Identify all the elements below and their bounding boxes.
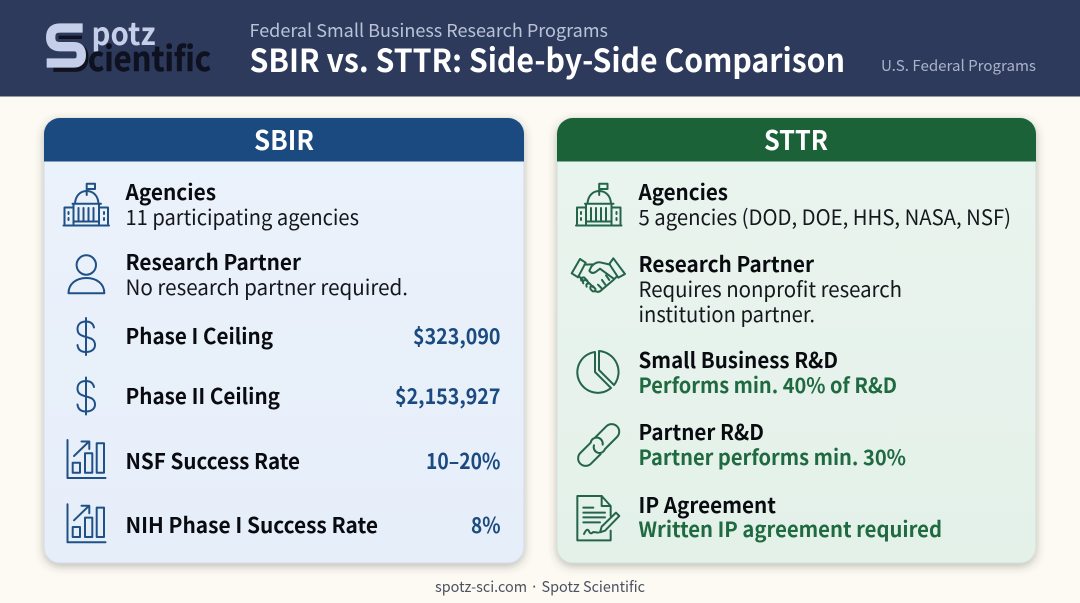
- icon: chain link: [578, 424, 619, 466]
- Partner R&D row: Partner R&D: [638, 416, 764, 447]
- NSF Success Rate row: 10–20%: [426, 445, 501, 476]
- footer: spotz-sci.com · Spotz Scientific: [435, 576, 645, 597]
- icon: dollar: [78, 318, 95, 355]
- STTR heading bar: [557, 118, 1036, 162]
- NSF Success Rate row: NSF Success Rate: [126, 445, 300, 476]
- icon: dollar: [78, 378, 95, 414]
- Small Business R&D row: [638, 344, 897, 400]
- SBIR heading bar: SBIR: [254, 119, 314, 158]
- logo: Spotz Scientific: cientific: [88, 32, 211, 81]
- Phase II Ceiling row: Phase II Ceiling: [126, 380, 280, 411]
- STTR heading bar: STTR: [764, 119, 828, 158]
- Agencies row: [638, 176, 1011, 232]
- icon: handshake: [572, 258, 625, 292]
- NIH Phase I Success Rate row: 8%: [471, 509, 501, 540]
- Partner R&D row: Partner performs min. 30%: [638, 442, 906, 472]
- Partner R&D row: [638, 416, 906, 472]
- Small Business R&D row: Small Business R&D: [638, 344, 838, 375]
- icon: capitol building: [576, 184, 622, 226]
- logo: Spotz Scientific: potz: [92, 9, 156, 54]
- IP Agreement row: Written IP agreement required: [638, 514, 942, 544]
- Small Business R&D row: Performs min. 40% of R&D: [638, 370, 897, 400]
- icon: pie chart: [577, 351, 619, 393]
- icon: person: [68, 255, 104, 293]
- Research Partner row: No research partner required.: [126, 272, 408, 302]
- Phase I Ceiling row: $323,090: [413, 320, 500, 351]
- Phase I Ceiling row: Phase I Ceiling: [126, 320, 273, 351]
- header title: SBIR vs. STTR: Side-by-Side Comparison: [250, 36, 845, 82]
- Agencies row: Agencies: [638, 176, 728, 207]
- Phase I Ceiling row: [126, 320, 500, 351]
- Research Partner row: institution partner.: [638, 299, 815, 329]
- icon: capitol building: [64, 184, 109, 226]
- icon: signed document: [577, 496, 619, 540]
- Agencies row: Agencies: [125, 176, 216, 207]
- Research Partner row: Research Partner: [126, 246, 302, 277]
- Research Partner row: Research Partner: [638, 248, 815, 279]
- Agencies row: [125, 176, 359, 232]
- Phase II Ceiling row: $2,153,927: [395, 380, 500, 411]
- SBIR heading bar: [44, 118, 524, 162]
- Agencies row: 5 agencies (DOD, DOE, HHS, NASA, NSF): [638, 202, 1011, 232]
- header tag: U.S. Federal Programs: [881, 55, 1036, 76]
- NSF Success Rate row: [126, 445, 501, 476]
- Research Partner row: [126, 246, 408, 302]
- header subtitle: Federal Small Business Research Programs: [250, 17, 608, 43]
- panel: SBIR: [44, 118, 524, 563]
- icon: bar chart: [68, 440, 106, 478]
- NIH Phase I Success Rate row: [126, 509, 501, 540]
- logo: Spotz Scientific: [47, 9, 211, 81]
- Phase II Ceiling row: [126, 380, 500, 411]
- header band: [0, 0, 1080, 96]
- IP Agreement row: [638, 489, 942, 544]
- Research Partner row: Requires nonprofit research: [638, 274, 902, 304]
- icon: bar chart: [68, 504, 106, 542]
- panel: STTR: [557, 118, 1036, 563]
- Agencies row: 11 participating agencies: [126, 202, 359, 232]
- IP Agreement row: IP Agreement: [638, 489, 776, 520]
- Research Partner row: [638, 248, 902, 329]
- NIH Phase I Success Rate row: NIH Phase I Success Rate: [126, 509, 378, 540]
